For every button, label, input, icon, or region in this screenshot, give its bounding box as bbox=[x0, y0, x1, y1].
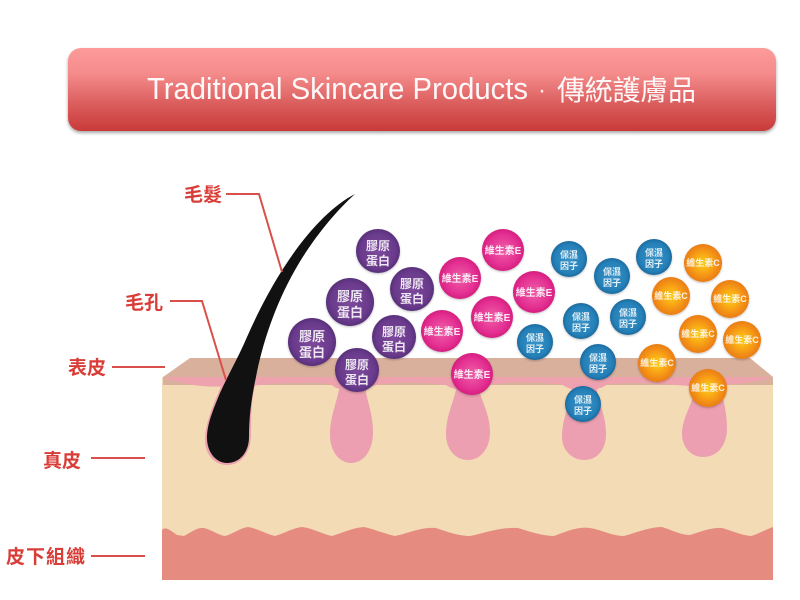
moisture ball 1 bbox=[551, 241, 587, 277]
vitamin C ball 2 bbox=[652, 277, 690, 315]
subcutaneous layer bbox=[162, 527, 773, 580]
hair shaft and bulb bbox=[207, 194, 355, 463]
vitamin E ball 4 bbox=[471, 296, 513, 338]
vitamin E ball 1 bbox=[482, 229, 524, 271]
moisture ball 6 bbox=[517, 324, 553, 360]
collagen ball 4: 膠原 bbox=[382, 325, 406, 339]
label: epidermis: 表皮 bbox=[68, 357, 106, 379]
moisture ball 1: 因子 bbox=[560, 260, 578, 271]
title banner: · bbox=[538, 77, 546, 104]
label: pore: 毛孔 bbox=[125, 292, 163, 314]
collagen ball 2: 膠原 bbox=[400, 277, 424, 291]
label: subcutaneous tissue bbox=[6, 546, 145, 568]
vitamin C ball 4: 維生素C bbox=[681, 328, 715, 339]
moisture ball 3: 保濕 bbox=[645, 247, 663, 258]
vitamin C ball 1: 維生素C bbox=[686, 257, 720, 268]
collagen ball 3 bbox=[326, 278, 374, 326]
collagen ball 6 bbox=[335, 348, 379, 392]
vitamin C ball 2: 維生素C bbox=[654, 290, 688, 301]
vitamin E ball 1: 維生素E bbox=[485, 244, 522, 257]
vitamin E ball 2: 維生素E bbox=[442, 272, 479, 285]
moisture ball 3 bbox=[636, 239, 672, 275]
moisture ball 4: 保濕 bbox=[572, 311, 590, 322]
vitamin C ball 1 bbox=[684, 244, 722, 282]
label: subcutaneous tissue: 皮下組織 bbox=[6, 546, 85, 568]
vitamin C ball 5: 維生素C bbox=[725, 334, 759, 345]
vitamin E ball 3: 維生素E bbox=[516, 286, 553, 299]
epidermis surface bbox=[163, 358, 773, 385]
moisture ball 2: 因子 bbox=[603, 277, 621, 288]
papilla 3 bbox=[562, 384, 606, 460]
papilla 4 bbox=[682, 384, 727, 457]
moisture ball 8: 因子 bbox=[574, 405, 592, 416]
collagen ball 3: 蛋白 bbox=[337, 305, 363, 320]
moisture ball 5 bbox=[610, 299, 646, 335]
dermis layer bbox=[162, 377, 773, 580]
collagen molecules bbox=[288, 229, 434, 392]
moisture ball 5: 因子 bbox=[619, 318, 637, 329]
title banner: Traditional Skincare Products bbox=[147, 71, 528, 106]
moisture ball 2 bbox=[594, 258, 630, 294]
collagen ball 4 bbox=[372, 315, 416, 359]
epidermis pink band bbox=[163, 377, 773, 390]
collagen ball 5: 膠原 bbox=[299, 329, 325, 344]
vitamin E molecules bbox=[421, 229, 555, 395]
moisture ball 8 bbox=[565, 386, 601, 422]
moisture ball 4 bbox=[563, 303, 599, 339]
vitamin E ball 4: 維生素E bbox=[474, 311, 511, 324]
moisture ball 6: 因子 bbox=[526, 343, 544, 354]
vitamin E ball 6 bbox=[451, 353, 493, 395]
moisture ball 7: 因子 bbox=[589, 363, 607, 374]
title banner bbox=[68, 48, 776, 131]
collagen ball 2: 蛋白 bbox=[400, 291, 424, 306]
moisture factor molecules bbox=[517, 239, 672, 422]
vitamin E ball 3 bbox=[513, 271, 555, 313]
label: dermis bbox=[43, 449, 145, 472]
moisture ball 6: 保濕 bbox=[526, 332, 544, 343]
label: epidermis bbox=[68, 357, 165, 379]
title banner: 傳統護膚品 bbox=[557, 75, 696, 106]
collagen ball 5 bbox=[288, 318, 336, 366]
label: hair bbox=[184, 184, 282, 272]
collagen ball 1: 膠原 bbox=[366, 239, 390, 253]
collagen ball 1: 蛋白 bbox=[366, 253, 390, 268]
moisture ball 1: 保濕 bbox=[560, 249, 578, 260]
vitamin C ball 4 bbox=[679, 315, 717, 353]
moisture ball 3: 因子 bbox=[645, 258, 663, 269]
collagen ball 4: 蛋白 bbox=[382, 339, 406, 354]
moisture ball 7 bbox=[580, 344, 616, 380]
vitamin E ball 5 bbox=[421, 310, 463, 352]
collagen ball 6: 蛋白 bbox=[345, 372, 369, 387]
moisture ball 2: 保濕 bbox=[603, 266, 621, 277]
label: hair: 毛髮 bbox=[184, 184, 222, 206]
vitamin E ball 6: 維生素E bbox=[454, 368, 491, 381]
moisture ball 4: 因子 bbox=[572, 322, 590, 333]
collagen ball 1 bbox=[356, 229, 400, 273]
label: dermis: 真皮 bbox=[43, 449, 81, 472]
vitamin E ball 5: 維生素E bbox=[424, 325, 461, 338]
collagen ball 6: 膠原 bbox=[345, 358, 369, 372]
vitamin C ball 3: 維生素C bbox=[713, 293, 747, 304]
vitamin C ball 3 bbox=[711, 280, 749, 318]
vitamin C ball 7 bbox=[689, 369, 727, 407]
hair with follicle bbox=[205, 194, 355, 465]
follicle halo bbox=[205, 375, 258, 465]
vitamin C ball 7: 維生素C bbox=[691, 382, 725, 393]
vitamin E ball 2 bbox=[439, 257, 481, 299]
label: pore bbox=[125, 292, 226, 380]
vitamin C ball 6 bbox=[638, 344, 676, 382]
collagen ball 3: 膠原 bbox=[337, 289, 363, 304]
moisture ball 8: 保濕 bbox=[574, 394, 592, 405]
papilla 2 bbox=[446, 384, 490, 460]
moisture ball 5: 保濕 bbox=[619, 307, 637, 318]
vitamin C ball 5 bbox=[723, 321, 761, 359]
collagen ball 5: 蛋白 bbox=[299, 345, 325, 360]
vitamin C molecules bbox=[638, 244, 761, 407]
papilla 1 bbox=[330, 384, 373, 463]
moisture ball 7: 保濕 bbox=[589, 352, 607, 363]
collagen ball 2 bbox=[390, 267, 434, 311]
skin cross-section bbox=[162, 358, 773, 580]
vitamin C ball 6: 維生素C bbox=[640, 357, 674, 368]
